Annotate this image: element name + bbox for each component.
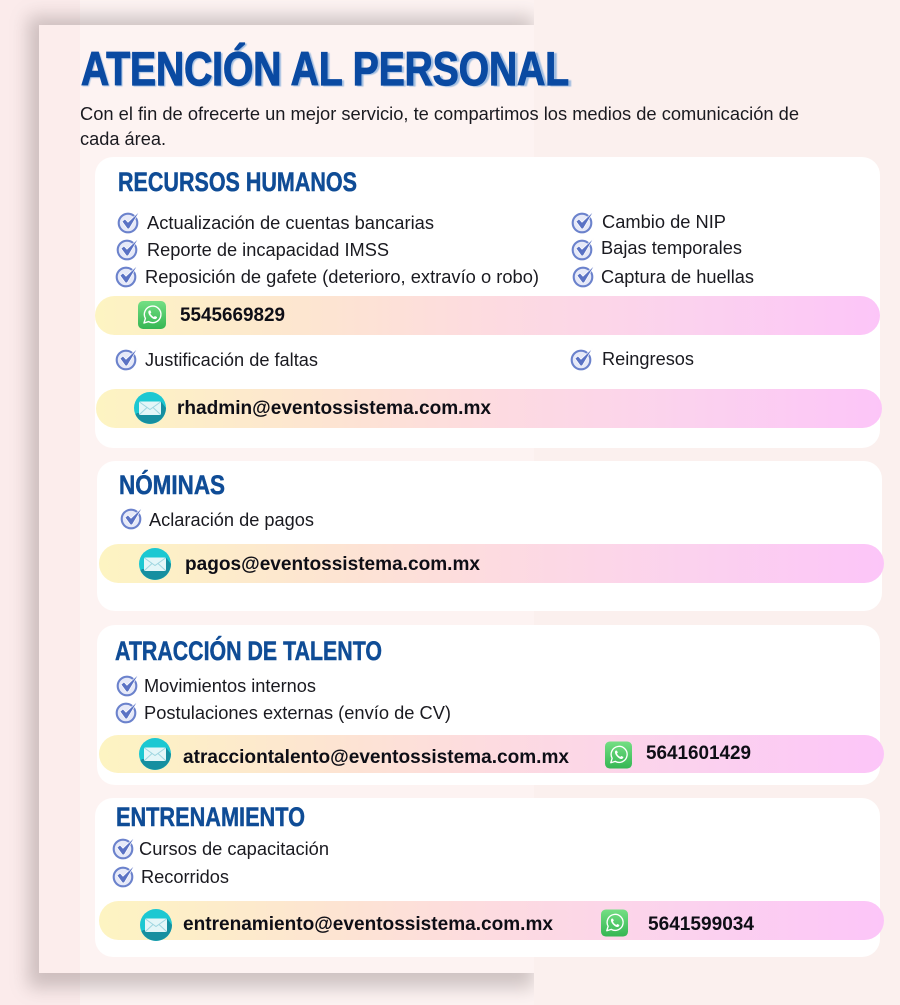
item: cursos de capacitación: Cursos de capacitación (139, 839, 329, 859)
title: ATENCIÓN AL PERSONAL (82, 43, 572, 96)
panel: entrenamiento (95, 798, 884, 957)
intro text: Con el fin de ofrecerte un mejor servicio, te compartimos los medios de comunicación de (80, 104, 799, 124)
heading: recursos humanos: RECURSOS HUMANOS (118, 167, 357, 197)
panel: recursos humanos (95, 157, 882, 448)
intro text (80, 104, 799, 149)
item: justificación de faltas: Justificación de faltas (145, 350, 318, 370)
contact bar: whatsapp recursos humanos: 5545669829 (180, 305, 285, 326)
item: aclaración de pagos: Aclaración de pagos (149, 510, 314, 530)
contact bar: correo nóminas: pagos@eventossistema.com.mx (185, 554, 480, 575)
panel: atracción de talento (97, 625, 884, 785)
contact bar: atracción de talento: 5641601429 (646, 743, 751, 764)
title: ATENCIÓN AL PERSONAL (81, 42, 569, 95)
intro text: cada área. (80, 129, 166, 149)
contact bar: correo recursos humanos: rhadmin@eventossistema.com.mx (177, 398, 491, 419)
item: movimientos internos: Movimientos internos (144, 676, 316, 696)
panel: nóminas (97, 461, 884, 611)
item: captura de huellas: Captura de huellas (601, 267, 754, 287)
item: actualización de cuentas: Actualización de cuentas bancarias (147, 213, 434, 233)
contact bar: correo nóminas (99, 544, 884, 583)
item: recorridos (114, 865, 229, 887)
contact bar: entrenamiento: 5641599034 (648, 914, 754, 935)
item: reposición de gafete: Reposición de gafete (deterioro, extravío o robo) (145, 267, 539, 287)
heading: atracción de talento: ATRACCIÓN DE TALENTO (115, 635, 382, 666)
contact bar: atracción de talento (99, 735, 884, 773)
item: cambio de NIP: Cambio de NIP (602, 212, 726, 232)
contact bar: entrenamiento: entrenamiento@eventossistema.com.mx (183, 914, 553, 935)
contact bar: correo recursos humanos (96, 389, 882, 428)
heading: entrenamiento: ENTRENAMIENTO (116, 802, 305, 832)
item: bajas temporales: Bajas temporales (601, 238, 742, 258)
item: recorridos: Recorridos (141, 867, 229, 887)
item: postulaciones externas: Postulaciones externas (envío de CV) (144, 703, 451, 723)
contact bar: entrenamiento (99, 901, 884, 941)
item: reingresos: Reingresos (602, 349, 694, 369)
contact bar: whatsapp recursos humanos (95, 296, 880, 335)
contact bar: atracción de talento: atracciontalento@eventossistema.com.mx (183, 747, 569, 768)
item: reingresos (572, 348, 694, 369)
item: reporte de incapacidad: Reporte de incapacidad IMSS (147, 240, 389, 260)
heading: nóminas: NÓMINAS (119, 469, 225, 500)
